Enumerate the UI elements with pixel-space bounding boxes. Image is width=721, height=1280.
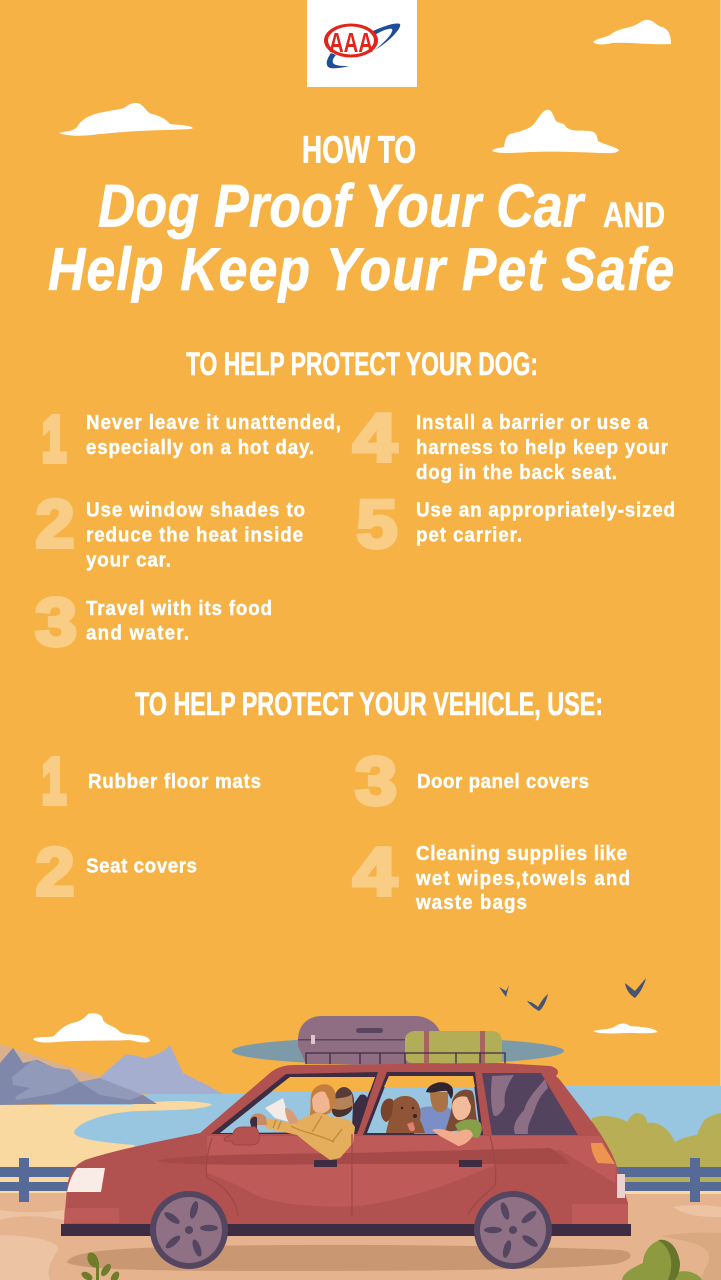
reflector xyxy=(617,1174,625,1198)
logo: AAA: AAA xyxy=(329,27,373,58)
wheel: front xyxy=(150,1191,228,1269)
car body xyxy=(64,1063,628,1224)
sweater xyxy=(265,1112,355,1160)
car xyxy=(61,1063,631,1236)
paper xyxy=(265,1098,290,1122)
vehicle tip 2 xyxy=(36,834,197,910)
seat xyxy=(352,1095,368,1132)
man head xyxy=(334,1087,354,1115)
title: Dog Proof Your Car xyxy=(98,172,586,239)
dog xyxy=(386,1096,425,1133)
dog tip 2: reduce the heat inside xyxy=(86,524,303,547)
car lighter door panels xyxy=(207,1136,616,1207)
cloud: top right xyxy=(593,20,671,44)
vehicle tip 4 xyxy=(353,834,630,914)
cloud: top left xyxy=(59,103,193,136)
door handle: front xyxy=(314,1160,337,1167)
man xyxy=(414,1106,454,1134)
dog tip 3 xyxy=(35,584,272,660)
dog tip 1: Never leave it unattended, xyxy=(86,411,341,434)
vehicle tip 2: 2 xyxy=(36,834,74,910)
dog tip 5: Use an appropriately-sized xyxy=(416,499,675,522)
dog tip 4: Install a barrier or use a xyxy=(416,411,648,434)
hands xyxy=(285,1108,298,1124)
fence: left xyxy=(0,1158,76,1202)
dog tip 5 xyxy=(356,486,675,562)
fence: right xyxy=(615,1158,721,1202)
cloud: lower right xyxy=(593,1023,658,1034)
passengers and dog xyxy=(381,1082,482,1146)
bumper bar xyxy=(61,1224,631,1236)
cloud: lower left xyxy=(33,1013,150,1043)
dog tip 5: pet carrier. xyxy=(416,524,522,547)
wheel: rear xyxy=(474,1191,552,1269)
vehicle tip 4: wet wipes,towels and xyxy=(415,867,630,890)
door lines xyxy=(206,1134,496,1217)
scene: landscape xyxy=(0,1044,721,1280)
car shadow xyxy=(67,1245,631,1271)
dog tip 1: 1 xyxy=(42,403,66,475)
vehicle tip 3: Door panel covers xyxy=(417,770,589,793)
dog tip 2: your car. xyxy=(86,549,171,572)
car body crease xyxy=(157,1148,570,1165)
dog tip 4 xyxy=(353,400,668,484)
dog tip 4: dog in the back seat. xyxy=(416,461,617,484)
side mirror xyxy=(224,1127,259,1145)
dog tip 1: especially on a hot day. xyxy=(86,436,314,459)
woman xyxy=(445,1090,478,1132)
title: AND xyxy=(603,196,665,235)
vehicle tip 1 xyxy=(42,745,261,817)
dog tip 3: and water. xyxy=(86,622,189,645)
driver xyxy=(250,1084,368,1160)
passenger window xyxy=(363,1072,483,1135)
heading: protect your dog: TO HELP PROTECT YOUR DOG: xyxy=(186,346,538,382)
right edge line xyxy=(720,0,721,1086)
vehicle tip 1: Rubber floor mats xyxy=(88,770,261,793)
title xyxy=(48,130,674,303)
dog tip 2: 2 xyxy=(36,486,74,562)
cloud: middle right xyxy=(492,110,619,153)
vehicle tip 1: 1 xyxy=(42,745,66,817)
dog tip 1 xyxy=(42,403,341,475)
title: HOW TO xyxy=(302,130,416,172)
dog tip 3: 3 xyxy=(35,584,77,660)
vehicle tip 4: 4 xyxy=(353,834,397,910)
dog tip 2 xyxy=(36,486,305,572)
dog tip 3: Travel with its food xyxy=(86,597,272,620)
bumper details xyxy=(64,1204,628,1224)
rear window xyxy=(482,1073,578,1135)
front window xyxy=(211,1072,378,1134)
vehicle tip 3: 3 xyxy=(355,743,397,819)
door handle: rear xyxy=(459,1160,482,1167)
rear light xyxy=(591,1143,615,1164)
plant: bottom left xyxy=(80,1251,121,1280)
woman head xyxy=(309,1084,336,1118)
title: Help Keep Your Pet Safe xyxy=(48,235,674,303)
vehicle tip 4: waste bags xyxy=(415,891,527,914)
dog tip 4: 4 xyxy=(353,400,397,476)
icon: birds xyxy=(499,978,646,1011)
vehicle tip 2: Seat covers xyxy=(86,855,197,878)
logo: AAA xyxy=(307,0,417,87)
vehicle tip 4: Cleaning supplies like xyxy=(416,842,627,865)
dog tip 4: harness to help keep your xyxy=(416,436,668,459)
roof luggage xyxy=(232,1016,564,1065)
bush: bottom right xyxy=(622,1240,702,1280)
vehicle tip 3 xyxy=(355,743,589,819)
dog tip 2: Use window shades to xyxy=(86,499,305,522)
headlight xyxy=(67,1168,105,1192)
dog tip 5: 5 xyxy=(356,486,398,562)
